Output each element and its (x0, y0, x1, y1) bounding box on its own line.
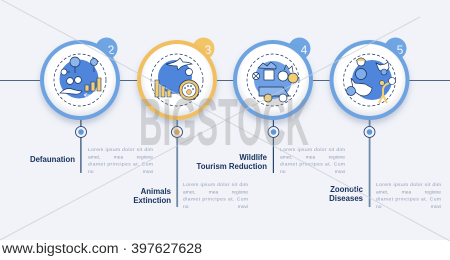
text block: Defaunation: diamet principes at. Cum (88, 162, 153, 168)
text block: Animals Extinction (183, 182, 248, 210)
text block: Zoonotic Diseases: no movi (376, 204, 441, 210)
circle frame (233, 40, 313, 120)
number badge: 5 (397, 43, 404, 57)
heading: Animals Extinction: Animals (141, 187, 172, 196)
text block: Defaunation: no movi (88, 169, 153, 175)
text block: Wildlife Tourism Reduction (280, 147, 345, 175)
heading: Defaunation: Defaunation (30, 155, 75, 164)
text block: Wildlife Tourism Reduction: Lorem ipsum dolor sit dim (280, 147, 345, 153)
heading: Wildlife Tourism Reduction: Tourism Reduction (197, 162, 267, 171)
text block: Animals Extinction: Lorem ipsum dolor sit dim (183, 182, 248, 188)
heading: Animals Extinction (133, 187, 172, 205)
text block: Animals Extinction: amet, mea regione (183, 190, 248, 196)
number badge: 2 (108, 43, 115, 57)
text block: Defaunation: amet, mea regione (88, 154, 153, 160)
circle frame (137, 40, 217, 120)
text block: Zoonotic Diseases (376, 182, 441, 210)
heading: Wildlife Tourism Reduction: Wildlife (239, 153, 268, 162)
heading: Wildlife Tourism Reduction (197, 153, 268, 171)
step 3: Wildlife Tourism Reduction (233, 38, 313, 173)
heading: Zoonotic Diseases: Diseases (329, 194, 364, 203)
text block: Defaunation (88, 147, 153, 175)
connector with node (268, 118, 279, 173)
connector with node (76, 118, 86, 173)
circle frame (330, 40, 410, 120)
step 4: Zoonotic Diseases (330, 38, 410, 207)
number badge: 3 (205, 43, 212, 57)
text block: Wildlife Tourism Reduction: no movi (280, 169, 345, 175)
footer: source line: www.bigstock.com · 397627628 (1, 241, 202, 256)
heading: Zoonotic Diseases (329, 185, 364, 203)
circle frame (40, 40, 120, 120)
heading: Zoonotic Diseases: Zoonotic (330, 185, 364, 194)
text block: Wildlife Tourism Reduction: amet, mea regione (280, 154, 345, 160)
number badge (384, 38, 406, 60)
text block: Animals Extinction: no movi (183, 204, 248, 210)
icon: forest and declining chart (60, 57, 102, 98)
timeline line (0, 80, 450, 81)
text block: Zoonotic Diseases: diamet principes at. Cum (376, 196, 441, 202)
text block: Defaunation: Lorem ipsum dolor sit dim (88, 147, 153, 153)
icon: safari jeep and animals (252, 61, 298, 102)
step 1: Defaunation (40, 38, 120, 173)
number badge: 4 (301, 43, 308, 57)
text block: Wildlife Tourism Reduction: diamet principes at. Cum (280, 162, 345, 168)
step 2: Animals Extinction (137, 38, 217, 207)
icon: extinct species and paw (155, 58, 199, 100)
heading: Animals Extinction: Extinction (133, 196, 171, 205)
text block: Animals Extinction: diamet principes at. Cum (183, 196, 248, 202)
connector with node (364, 118, 375, 207)
number badge (192, 38, 214, 60)
connector with node (172, 118, 182, 207)
icon: person, animals and viruses (346, 58, 396, 103)
text block: Zoonotic Diseases: amet, mea regione (376, 190, 441, 196)
text block: Zoonotic Diseases: Lorem ipsum dolor sit dim (376, 182, 441, 188)
